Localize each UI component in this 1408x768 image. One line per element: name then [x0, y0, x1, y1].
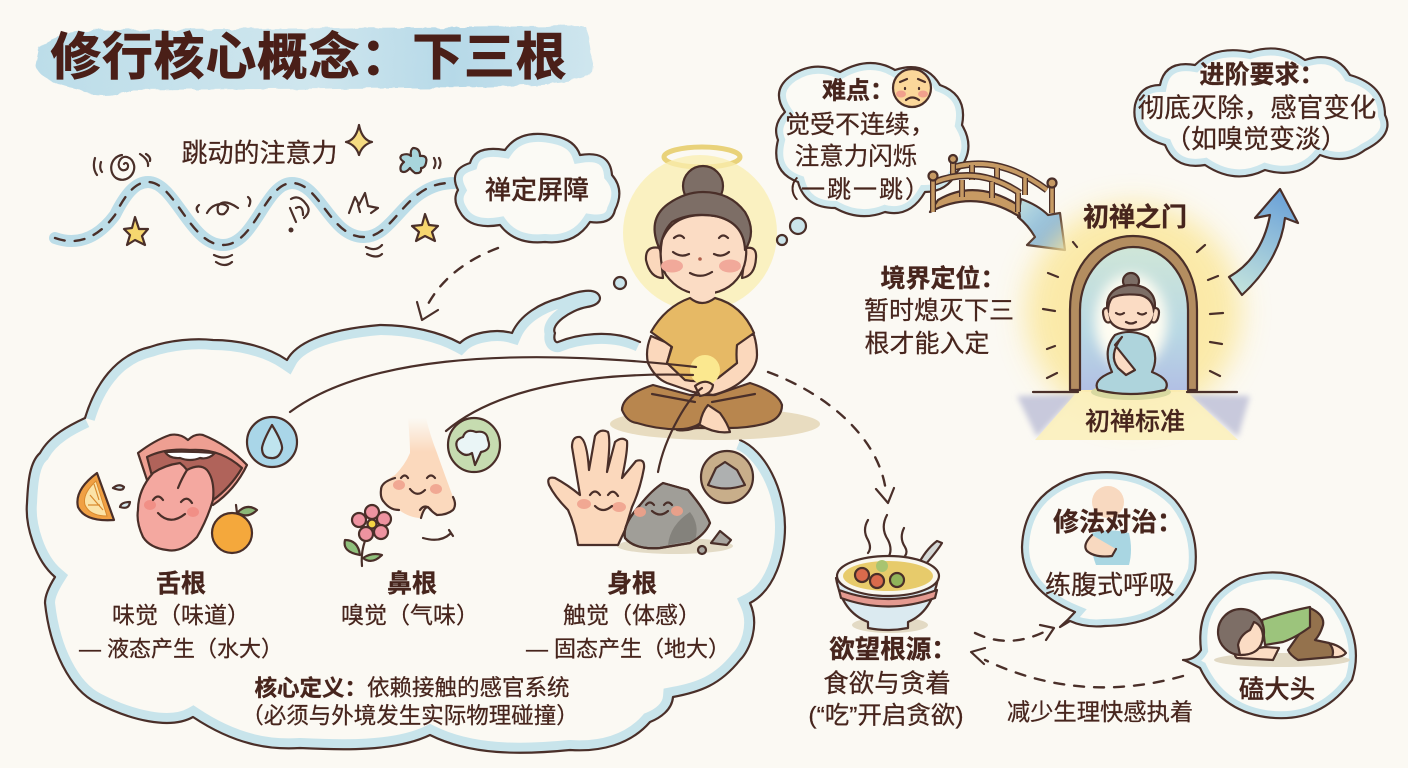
cloud: difficulty: （一跳一跳） — [775, 176, 931, 204]
halo ring — [664, 147, 740, 167]
core definition: 核心定义：依赖接触的感官系统 — [254, 676, 570, 700]
yellow glow — [1025, 204, 1241, 420]
hair bun — [683, 166, 723, 206]
realm position text — [864, 264, 1014, 358]
desire source text — [808, 636, 964, 730]
attention label: 跳动的注意力 — [181, 138, 338, 168]
arrow: back to desire — [971, 648, 1183, 687]
nose base line — [381, 478, 455, 518]
face — [1218, 609, 1264, 655]
label: nose root — [341, 570, 479, 628]
flower — [362, 527, 372, 566]
bubble tint — [1183, 572, 1356, 718]
foot — [1328, 643, 1346, 657]
cloud shape — [776, 63, 968, 216]
label: body root: 身根 — [607, 570, 657, 598]
cloud: advanced requirement — [1134, 48, 1388, 176]
cloud outline — [776, 63, 968, 216]
floor light — [1035, 392, 1238, 440]
door title: 初禅之门 — [1083, 202, 1187, 232]
ground lines — [1033, 391, 1237, 393]
label: tongue root: 舌根 — [156, 570, 206, 598]
bubble fill — [1183, 572, 1356, 718]
arrow: desire — [768, 372, 894, 503]
label: nose root: 嗅觉（气味） — [341, 602, 479, 628]
icon: bowl of food — [836, 515, 942, 633]
realm position text: 境界定位： — [880, 264, 1006, 293]
ears — [646, 248, 756, 278]
big cloud outline — [27, 291, 785, 753]
icon: spiral — [111, 155, 134, 180]
thought dots — [614, 218, 806, 289]
arrow: into first dhyana — [1018, 199, 1065, 250]
arrow: barrier to senses — [417, 248, 498, 320]
cloud outline — [1134, 48, 1388, 176]
ground shadow — [610, 408, 820, 440]
practice heading: 修法对治： — [1053, 507, 1183, 537]
icon: water drop — [247, 417, 297, 467]
arms — [647, 332, 757, 395]
hands — [695, 382, 713, 396]
spoon — [917, 541, 942, 567]
steam — [865, 515, 906, 558]
legs — [1288, 608, 1333, 660]
label: body root: — 固态产生（地大） — [526, 636, 730, 662]
deck — [930, 190, 1020, 217]
lips — [138, 435, 247, 505]
bubble outline — [1183, 572, 1356, 718]
rock shadow — [617, 538, 733, 554]
icon: star left — [124, 217, 148, 245]
cloud: advanced requirement: （如嗅觉变淡） — [1165, 124, 1347, 154]
difficulty body: 觉受不连续， — [785, 111, 935, 139]
rock badge — [701, 451, 753, 503]
bubble: kowtow — [1183, 572, 1356, 718]
big cloud fill — [27, 291, 785, 753]
panel: senses cloud — [27, 291, 785, 753]
neck — [690, 290, 715, 303]
caption: reduce attachment: 减少生理快感执着 — [1007, 699, 1193, 725]
cloud tint — [455, 134, 619, 242]
kowtow label: 磕大头 — [1239, 676, 1315, 704]
wave dashes — [55, 182, 450, 245]
back rail — [955, 164, 1047, 190]
attention wave panel — [55, 125, 455, 265]
dan tian glow — [690, 355, 720, 385]
icon: sparkle — [346, 125, 372, 155]
juice drops — [113, 485, 130, 508]
food — [843, 561, 933, 591]
core definition — [241, 676, 579, 728]
foot — [677, 405, 730, 432]
cloud tint — [1134, 48, 1388, 176]
difficulty heading: 难点： — [822, 78, 894, 104]
icon: flower — [400, 148, 426, 173]
arm — [1235, 647, 1279, 660]
light rays — [1043, 242, 1223, 378]
label: body root — [526, 570, 730, 662]
icon: tongue group — [77, 417, 297, 553]
face lines — [673, 236, 729, 276]
monk figure — [610, 147, 820, 440]
label: body root: 触觉（体感） — [563, 602, 701, 628]
shadow — [852, 617, 928, 633]
cloud shape — [1134, 48, 1388, 176]
label: nose root: 鼻根 — [387, 570, 437, 598]
practice text: 练腹式呼吸 — [1045, 570, 1175, 600]
advanced body: 彻底灭除，感官变化 — [1138, 93, 1376, 123]
title — [35, 26, 592, 95]
face — [661, 215, 746, 294]
breathing figure — [1092, 486, 1124, 518]
cloud: difficulty — [775, 63, 968, 216]
arrow: to breathing practice — [975, 625, 1054, 641]
icon: burst doodle — [288, 228, 294, 232]
big cloud tint — [27, 291, 785, 753]
door arch — [1070, 236, 1197, 390]
door interior — [1080, 247, 1188, 390]
bubble outline — [1022, 472, 1196, 627]
tongue — [138, 463, 213, 550]
glow — [623, 155, 777, 311]
label: tongue root: — 液态产生（水大） — [79, 636, 283, 662]
hair — [655, 192, 751, 250]
cloud: meditation barrier — [455, 134, 619, 242]
nose — [381, 418, 455, 518]
mini monk — [1091, 273, 1171, 400]
cloud: difficulty: 注意力闪烁 — [795, 142, 917, 170]
orange fruit — [212, 513, 252, 553]
jitter marks — [94, 154, 440, 265]
tongue face — [144, 500, 156, 510]
first dhyana door panel — [1017, 202, 1250, 440]
cloud tint — [776, 63, 968, 216]
icon: worried face — [893, 69, 931, 107]
shirt — [651, 298, 754, 381]
wave ribbon — [55, 182, 455, 245]
core definition: （必须与外境发生实际物理碰撞） — [241, 704, 579, 728]
shirt — [1262, 607, 1310, 645]
front posts — [933, 178, 1018, 212]
bowl stripe — [839, 590, 937, 606]
title text: 修行核心概念：下三根 — [50, 28, 568, 86]
orange slice — [77, 473, 114, 520]
rock — [625, 483, 710, 548]
bridge — [928, 155, 1056, 217]
desire source text: 欲望根源： — [829, 636, 957, 664]
teeth — [165, 452, 215, 460]
desire source text: 食欲与贪着 — [823, 670, 951, 698]
mouth interior — [147, 450, 242, 500]
back posts — [953, 160, 1052, 213]
label: tongue root: 味觉（味道） — [112, 602, 250, 628]
icon: hand and rock group — [548, 431, 753, 554]
mat shadow — [1214, 653, 1350, 667]
cloud outline — [455, 134, 619, 242]
bowl body — [836, 578, 938, 630]
title watercolor banner — [35, 26, 592, 95]
hand — [548, 431, 644, 545]
icon: star right — [412, 214, 438, 241]
advanced heading: 进阶要求： — [1199, 61, 1325, 89]
front rail — [935, 176, 1020, 193]
realm position text: 根才能入定 — [864, 330, 990, 358]
legs — [622, 383, 782, 429]
cloud shape — [455, 134, 619, 242]
icon: nose group — [345, 418, 500, 566]
cheeks — [661, 260, 683, 272]
bubble: breathing practice — [1022, 472, 1196, 627]
desire source text: (“吃”开启贪欲) — [808, 702, 964, 730]
squiggle marks — [197, 197, 309, 222]
arrow: advance upward — [1229, 189, 1298, 295]
barrier label: 禅定屏障 — [485, 175, 589, 205]
pebbles — [711, 531, 731, 545]
connector lines — [290, 357, 702, 472]
bubble fill — [1022, 472, 1196, 627]
floor shadows — [1017, 394, 1250, 437]
rim — [837, 556, 939, 596]
label: tongue root — [79, 570, 283, 662]
smell cloud — [448, 418, 500, 472]
door caption: 初禅标准 — [1085, 408, 1185, 436]
bubble tint — [1022, 472, 1196, 627]
realm position text: 暂时熄灭下三 — [864, 297, 1014, 325]
